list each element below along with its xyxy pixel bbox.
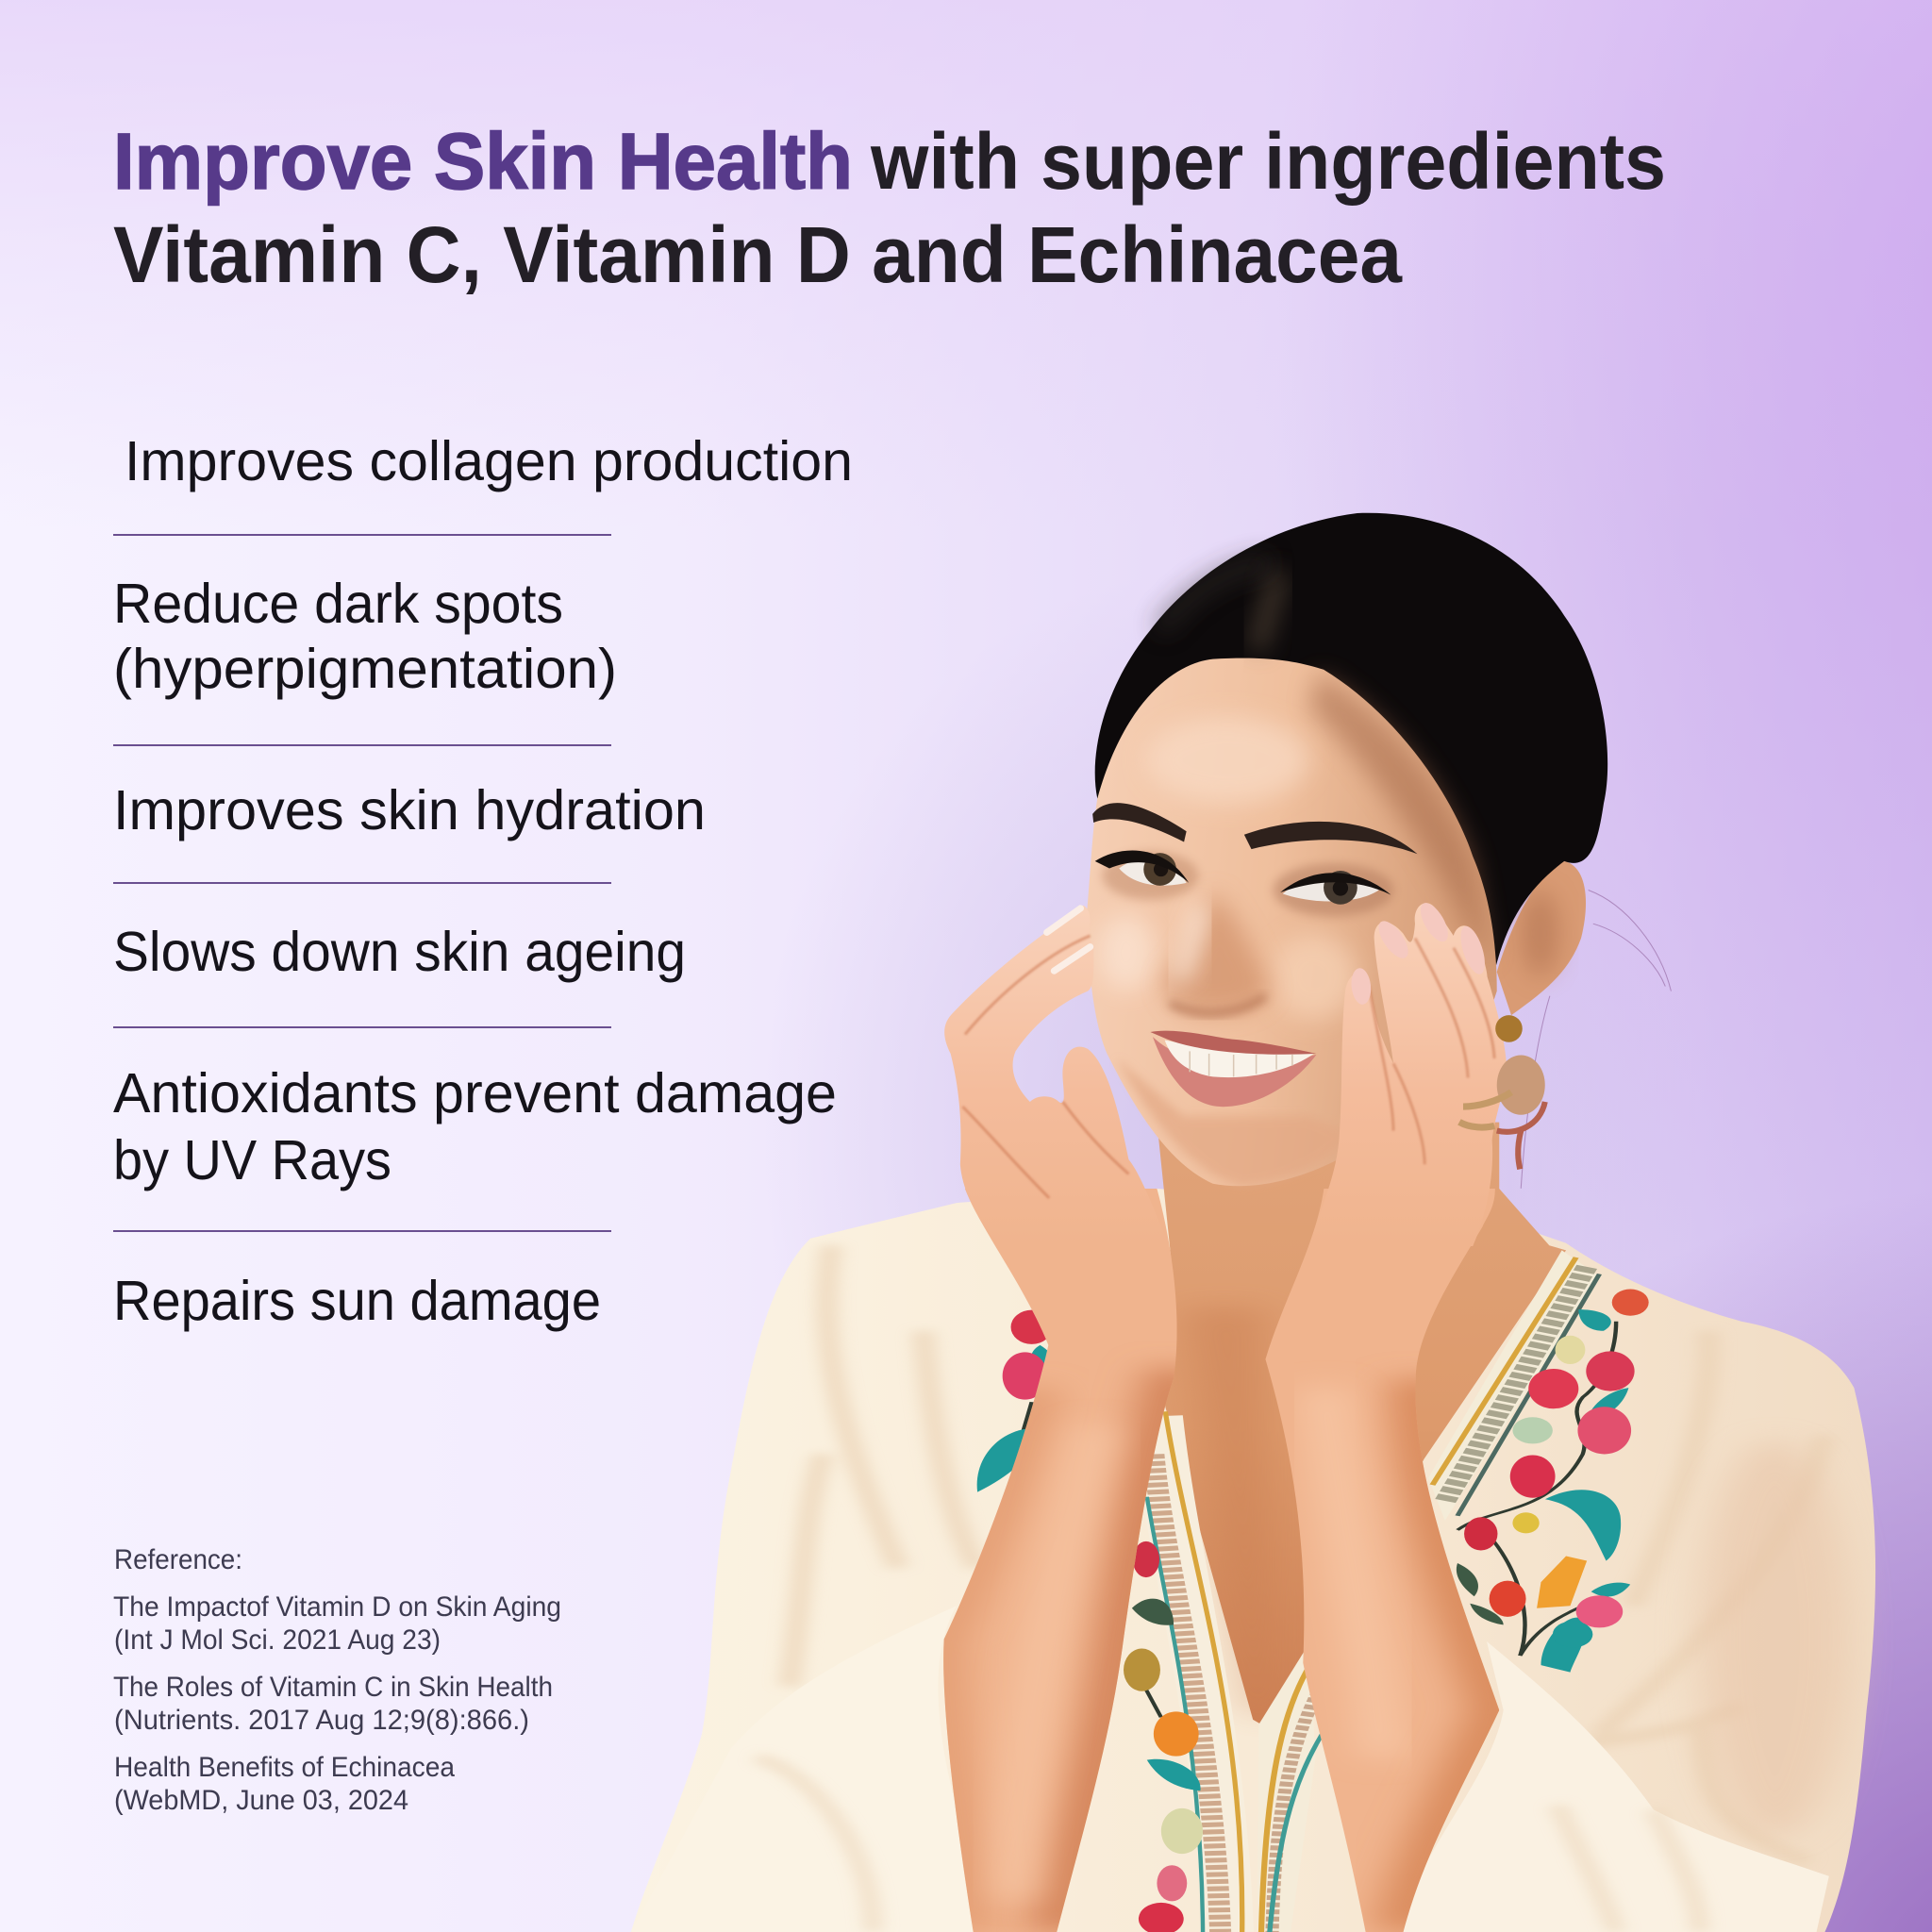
reference 1 [113,1591,561,1656]
left forearm highlight [1015,1425,1098,1900]
ear shading [1521,890,1559,976]
garment and body [631,1123,1875,1932]
benefit 5 [113,1062,837,1191]
benefit 1: Improves collagen production [125,430,853,492]
left eye socket [1102,852,1198,900]
right lashes [1280,873,1391,895]
flyaway strands [1521,890,1671,1189]
mouth [1150,1031,1316,1107]
left hand shape [944,906,1170,1246]
left forearm [943,1189,1177,1932]
left eye white [1119,858,1187,886]
cheek highlight [1097,914,1155,991]
left eyebrow [1092,803,1187,841]
head [944,513,1671,1246]
earring stud [1495,1015,1523,1042]
title [113,117,1666,299]
dark leaves [1132,1563,1504,1625]
title purple phrase: Improve Skin Health [113,117,853,206]
centre shadow [1182,1307,1270,1720]
kurta body [631,1189,1875,1932]
teeth [1165,1041,1314,1077]
embroidery leaves [977,1309,1630,1790]
left neckline trim [1147,1411,1242,1932]
nose highlight [1179,905,1201,981]
divider 1 [113,534,611,536]
nose shading [1164,890,1271,1013]
face [1087,658,1497,1186]
jaw shading [1117,1058,1353,1186]
right eye [1273,863,1393,917]
left pupil [1154,862,1168,876]
divider 3 [113,882,611,884]
left hand [944,906,1170,1246]
ring [1459,1092,1511,1127]
cheek shading right [1271,933,1357,1020]
benefit 4: Slows down skin ageing [113,921,686,983]
woman illustration [631,513,1875,1932]
right eye white [1283,876,1379,902]
right pupil [1333,880,1348,896]
benefit 2: (hyperpigmentation) [113,638,617,700]
right hand finger shading [1370,938,1494,1164]
right cuff [1399,1641,1829,1932]
nostril shadow [1170,996,1266,1013]
left eye [1095,850,1198,900]
benefit 2 [113,573,617,700]
right eye socket [1273,863,1393,917]
right hand shape [1309,903,1507,1246]
right hand [1309,899,1507,1246]
title dark phrase: with super ingredients [870,117,1666,206]
right forearm right shading [1403,1378,1499,1932]
hair shadow on forehead [1309,674,1492,967]
reference heading: Reference: [114,1544,242,1575]
right nails [1350,899,1490,1006]
left nail 2 [1054,947,1091,971]
benefit 6: Repairs sun damage [113,1270,601,1332]
reference 3: Health Benefits of Echinacea [114,1752,455,1783]
tooth gaps [1190,1051,1292,1076]
benefit 3: Improves skin hydration [113,779,706,841]
hair sheen [1160,563,1271,630]
reference 3 [114,1752,455,1816]
left lashes [1095,850,1189,883]
earring beads [1497,1102,1545,1169]
right shoulder shading [1700,1440,1850,1839]
reference 1: (Int J Mol Sci. 2021 Aug 23) [114,1624,441,1656]
earring body [1497,1055,1545,1115]
left finger crease [962,936,1128,1198]
embroidery flowers [1003,1290,1649,1932]
right forearm highlight [1324,1388,1382,1757]
right eyebrow [1244,822,1418,854]
left forearm base [943,1189,1177,1932]
cuff fold shading [757,1757,1700,1932]
reference 1: The Impactof Vitamin D on Skin Aging [113,1591,561,1623]
divider 4 [113,1026,611,1028]
right lower neckline trim [1257,1643,1323,1932]
reference 2: (Nutrients. 2017 Aug 12;9(8):866.) [114,1705,529,1736]
right forearm [1266,1189,1500,1932]
divider 2 [113,744,611,746]
left cuff [631,1606,974,1932]
left nail 1 [1047,908,1080,932]
ear [1497,861,1586,1015]
benefits list [113,430,853,1332]
earring and ring [1459,1015,1545,1169]
forehead highlight [1145,717,1309,804]
title second line: Vitamin C, Vitamin D and Echinacea [113,210,1403,299]
right forearm base [1266,1189,1500,1932]
right iris [1324,871,1357,905]
lower lip [1153,1037,1316,1107]
left forearm right shading [1057,1369,1178,1932]
reference 2: The Roles of Vitamin C in Skin Health [113,1672,553,1703]
upper lip [1150,1031,1316,1055]
benefit 5: Antioxidants prevent damage [113,1062,837,1124]
reference 2 [113,1672,553,1736]
references [113,1544,561,1816]
left forearm left shading [943,1388,1040,1932]
chest [1157,1123,1566,1726]
divider 5 [113,1230,611,1232]
reference 3: (WebMD, June 03, 2024 [114,1785,408,1816]
benefit 5: by UV Rays [113,1129,391,1191]
embroidery stems [1024,1322,1616,1717]
right upper neckline trim [1428,1250,1599,1521]
left iris [1143,853,1176,886]
cloth folds [790,1245,1824,1862]
benefit 2: Reduce dark spots [113,573,563,635]
parting highlight [1257,573,1280,649]
hair [1095,513,1607,972]
